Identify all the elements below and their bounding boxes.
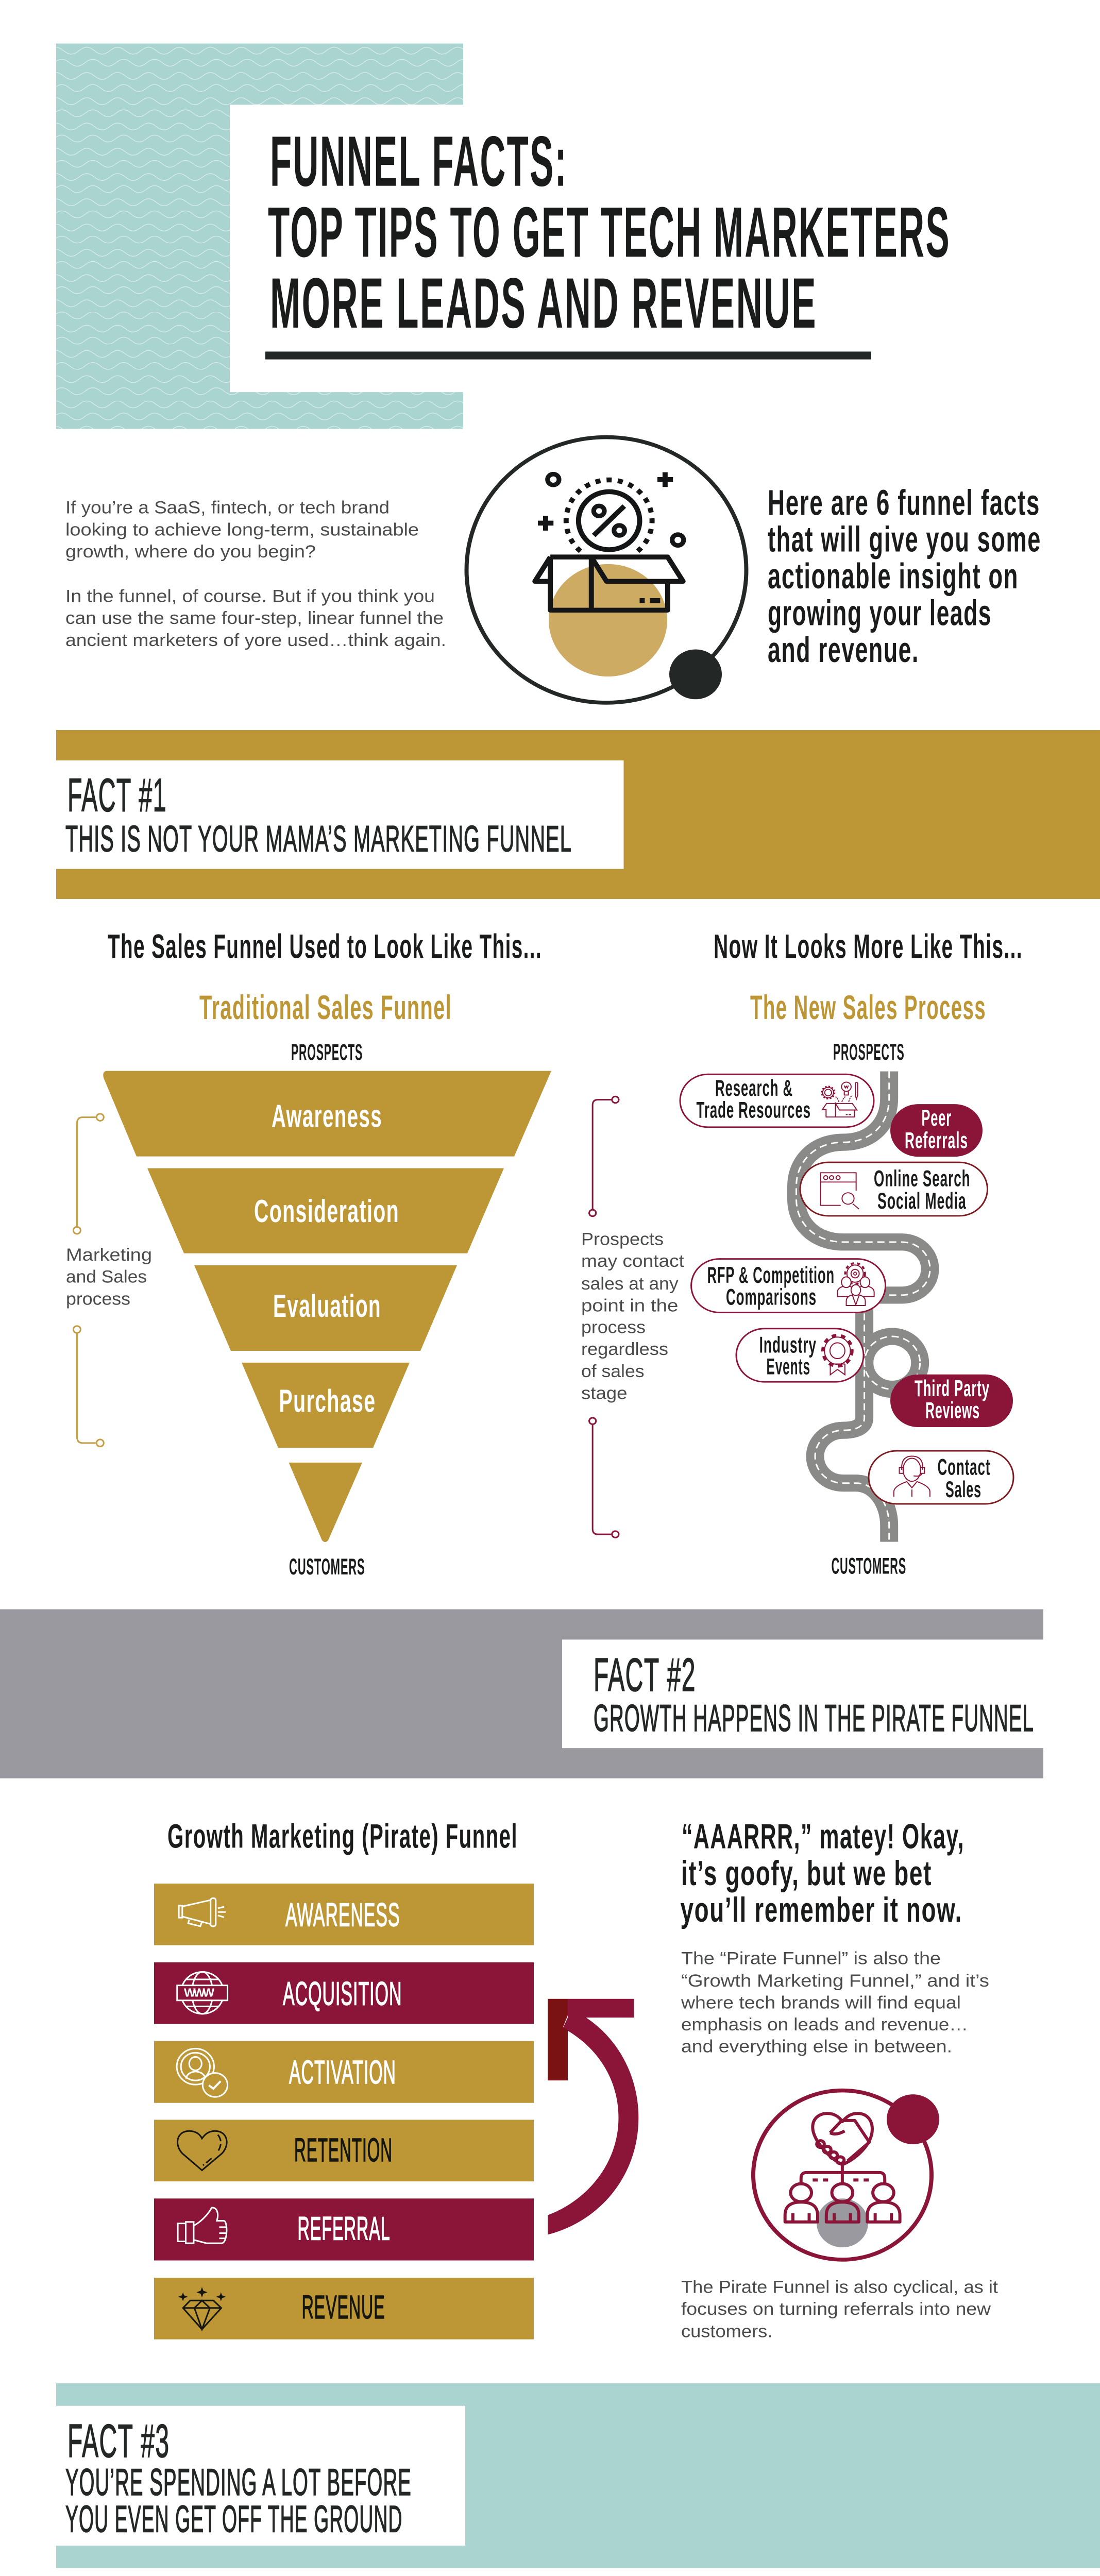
title — [268, 122, 951, 343]
pirate funnel body text: The “Pirate Funnel” is also the — [681, 1948, 941, 1968]
fact 3 banner: YOU’RE SPENDING A LOT BEFORE — [65, 2461, 412, 2503]
row: acquisition: ACQUISITION — [283, 1975, 402, 2012]
icon: handshake heart and team — [753, 2091, 939, 2260]
header panel: wave pattern block — [56, 43, 1100, 429]
prospects bracket note: sales at any — [581, 1274, 679, 1294]
row: acquisition — [154, 1962, 534, 2024]
pirate funnel headline — [681, 1817, 964, 1929]
new sales process road: CUSTOMERS — [832, 1553, 906, 1579]
title underline — [265, 351, 871, 360]
pill: RFP and competition comparisons: Comparisons — [726, 1284, 817, 1310]
pill: contact sales: Contact — [938, 1454, 990, 1480]
pill: RFP and competition comparisons — [691, 1259, 886, 1312]
prospects bracket note: may contact — [581, 1251, 684, 1271]
pill: third party reviews: Reviews — [925, 1398, 980, 1423]
fact 3 banner: FACT #3 — [67, 2414, 170, 2467]
prospects bracket note: regardless — [581, 1340, 668, 1359]
prospects bracket note: point in the — [581, 1296, 679, 1315]
pirate funnel body text — [681, 1948, 989, 2056]
pirate funnel closing text: focuses on turning referrals into new — [681, 2299, 991, 2319]
cycle arrow — [548, 1999, 638, 2234]
marketing and sales bracket — [66, 1114, 152, 1447]
intro text — [65, 498, 446, 650]
traditional funnel chart: Evaluation — [273, 1289, 381, 1324]
traditional funnel chart — [103, 1040, 551, 1580]
fact 2 banner: FACT #2 — [594, 1648, 696, 1701]
intro text: growth, where do you begin? — [65, 542, 316, 562]
pill: contact sales — [869, 1451, 1013, 1504]
pill: peer referrals — [890, 1104, 983, 1157]
traditional funnel chart: Purchase — [279, 1384, 376, 1419]
icon: open box with percent badge in orbit circle — [467, 437, 746, 703]
intro callout: and revenue. — [768, 631, 919, 670]
pill: contact sales: Sales — [945, 1477, 981, 1502]
fact 3 banner: YOU EVEN GET OFF THE GROUND — [65, 2498, 403, 2540]
row: awareness — [154, 1884, 534, 1945]
traditional funnel chart: PROSPECTS — [291, 1040, 363, 1065]
pill: research and trade resources — [680, 1074, 874, 1127]
row: retention — [154, 2120, 534, 2181]
pill: third party reviews: Third Party — [915, 1376, 990, 1401]
row: activation — [154, 2041, 534, 2103]
pill: third party reviews — [890, 1375, 1013, 1427]
pill: research and trade resources: Research & — [715, 1075, 793, 1101]
pill: online search and social media — [800, 1162, 987, 1216]
pill: peer referrals: Peer — [922, 1105, 952, 1131]
pill: online search and social media: Online Search — [874, 1166, 971, 1191]
row: retention: RETENTION — [294, 2132, 393, 2168]
row: revenue: REVENUE — [302, 2289, 385, 2325]
fact 3 banner — [56, 2383, 1100, 2568]
pirate funnel body text: where tech brands will find equal — [681, 1993, 961, 2012]
fact 1 banner: THIS IS NOT YOUR MAMA’S MARKETING FUNNEL — [65, 819, 572, 859]
fact 1 banner: FACT #1 — [67, 769, 167, 821]
new sales process road — [797, 1039, 930, 1579]
pirate funnel closing text: customers. — [681, 2321, 772, 2341]
row: activation: ACTIVATION — [289, 2054, 396, 2091]
pill: RFP and competition comparisons: RFP & Competition — [707, 1262, 835, 1288]
left heading: old funnel: The Sales Funnel Used to Look Like This... — [108, 928, 542, 965]
row: awareness: AWARENESS — [285, 1896, 400, 1933]
pill: research and trade resources: Trade Resources — [697, 1097, 811, 1123]
intro text: If you’re a SaaS, fintech, or tech brand — [65, 498, 390, 517]
marketing and sales bracket: and Sales — [66, 1267, 147, 1286]
new sales process road: PROSPECTS — [833, 1039, 904, 1064]
pill: industry events: Industry — [759, 1332, 817, 1358]
intro text: In the funnel, of course. But if you think you — [65, 586, 435, 606]
fact 1 banner — [56, 730, 1100, 899]
pirate funnel body text: and everything else in between. — [681, 2037, 952, 2056]
marketing and sales bracket: process — [66, 1289, 130, 1309]
pill: peer referrals: Referrals — [905, 1128, 968, 1153]
pill: industry events: Events — [767, 1354, 810, 1379]
prospects bracket note: process — [581, 1317, 646, 1337]
marketing and sales bracket: Marketing — [66, 1245, 152, 1265]
traditional funnel chart: Consideration — [254, 1194, 399, 1229]
row: acquisition: WWW — [184, 1986, 215, 1999]
intro text: ancient marketers of yore used…think again. — [65, 631, 446, 650]
row: referral: REFERRAL — [298, 2210, 391, 2247]
traditional funnel chart: CUSTOMERS — [289, 1554, 365, 1580]
pirate funnel body text: emphasis on leads and revenue… — [681, 2015, 968, 2035]
row: revenue — [154, 2278, 534, 2340]
pirate funnel closing text — [681, 2277, 998, 2341]
pirate funnel headline: it’s goofy, but we bet — [681, 1854, 932, 1892]
intro callout — [768, 483, 1041, 670]
intro text: looking to achieve long-term, sustainable — [65, 520, 419, 539]
intro text: can use the same four-step, linear funnel the — [65, 608, 444, 628]
row: referral — [154, 2198, 534, 2261]
pirate funnel body text: “Growth Marketing Funnel,” and it’s — [681, 1971, 989, 1991]
fact 2 banner — [0, 1609, 1043, 1778]
pill: online search and social media: Social Media — [877, 1188, 967, 1214]
prospects bracket note: of sales — [581, 1362, 645, 1381]
prospects bracket note: stage — [581, 1383, 628, 1403]
pill: industry events — [736, 1329, 864, 1382]
heading: growth marketing pirate funnel: Growth Marketing (Pirate) Funnel — [167, 1818, 518, 1855]
title: FUNNEL FACTS: — [270, 122, 568, 201]
chart title: traditional funnel: Traditional Sales Funnel — [199, 989, 452, 1027]
prospects bracket note: Prospects — [581, 1229, 664, 1249]
pirate funnel closing text: The Pirate Funnel is also cyclical, as it — [681, 2277, 998, 2297]
traditional funnel chart: Awareness — [272, 1099, 382, 1134]
prospects bracket note — [581, 1096, 684, 1537]
